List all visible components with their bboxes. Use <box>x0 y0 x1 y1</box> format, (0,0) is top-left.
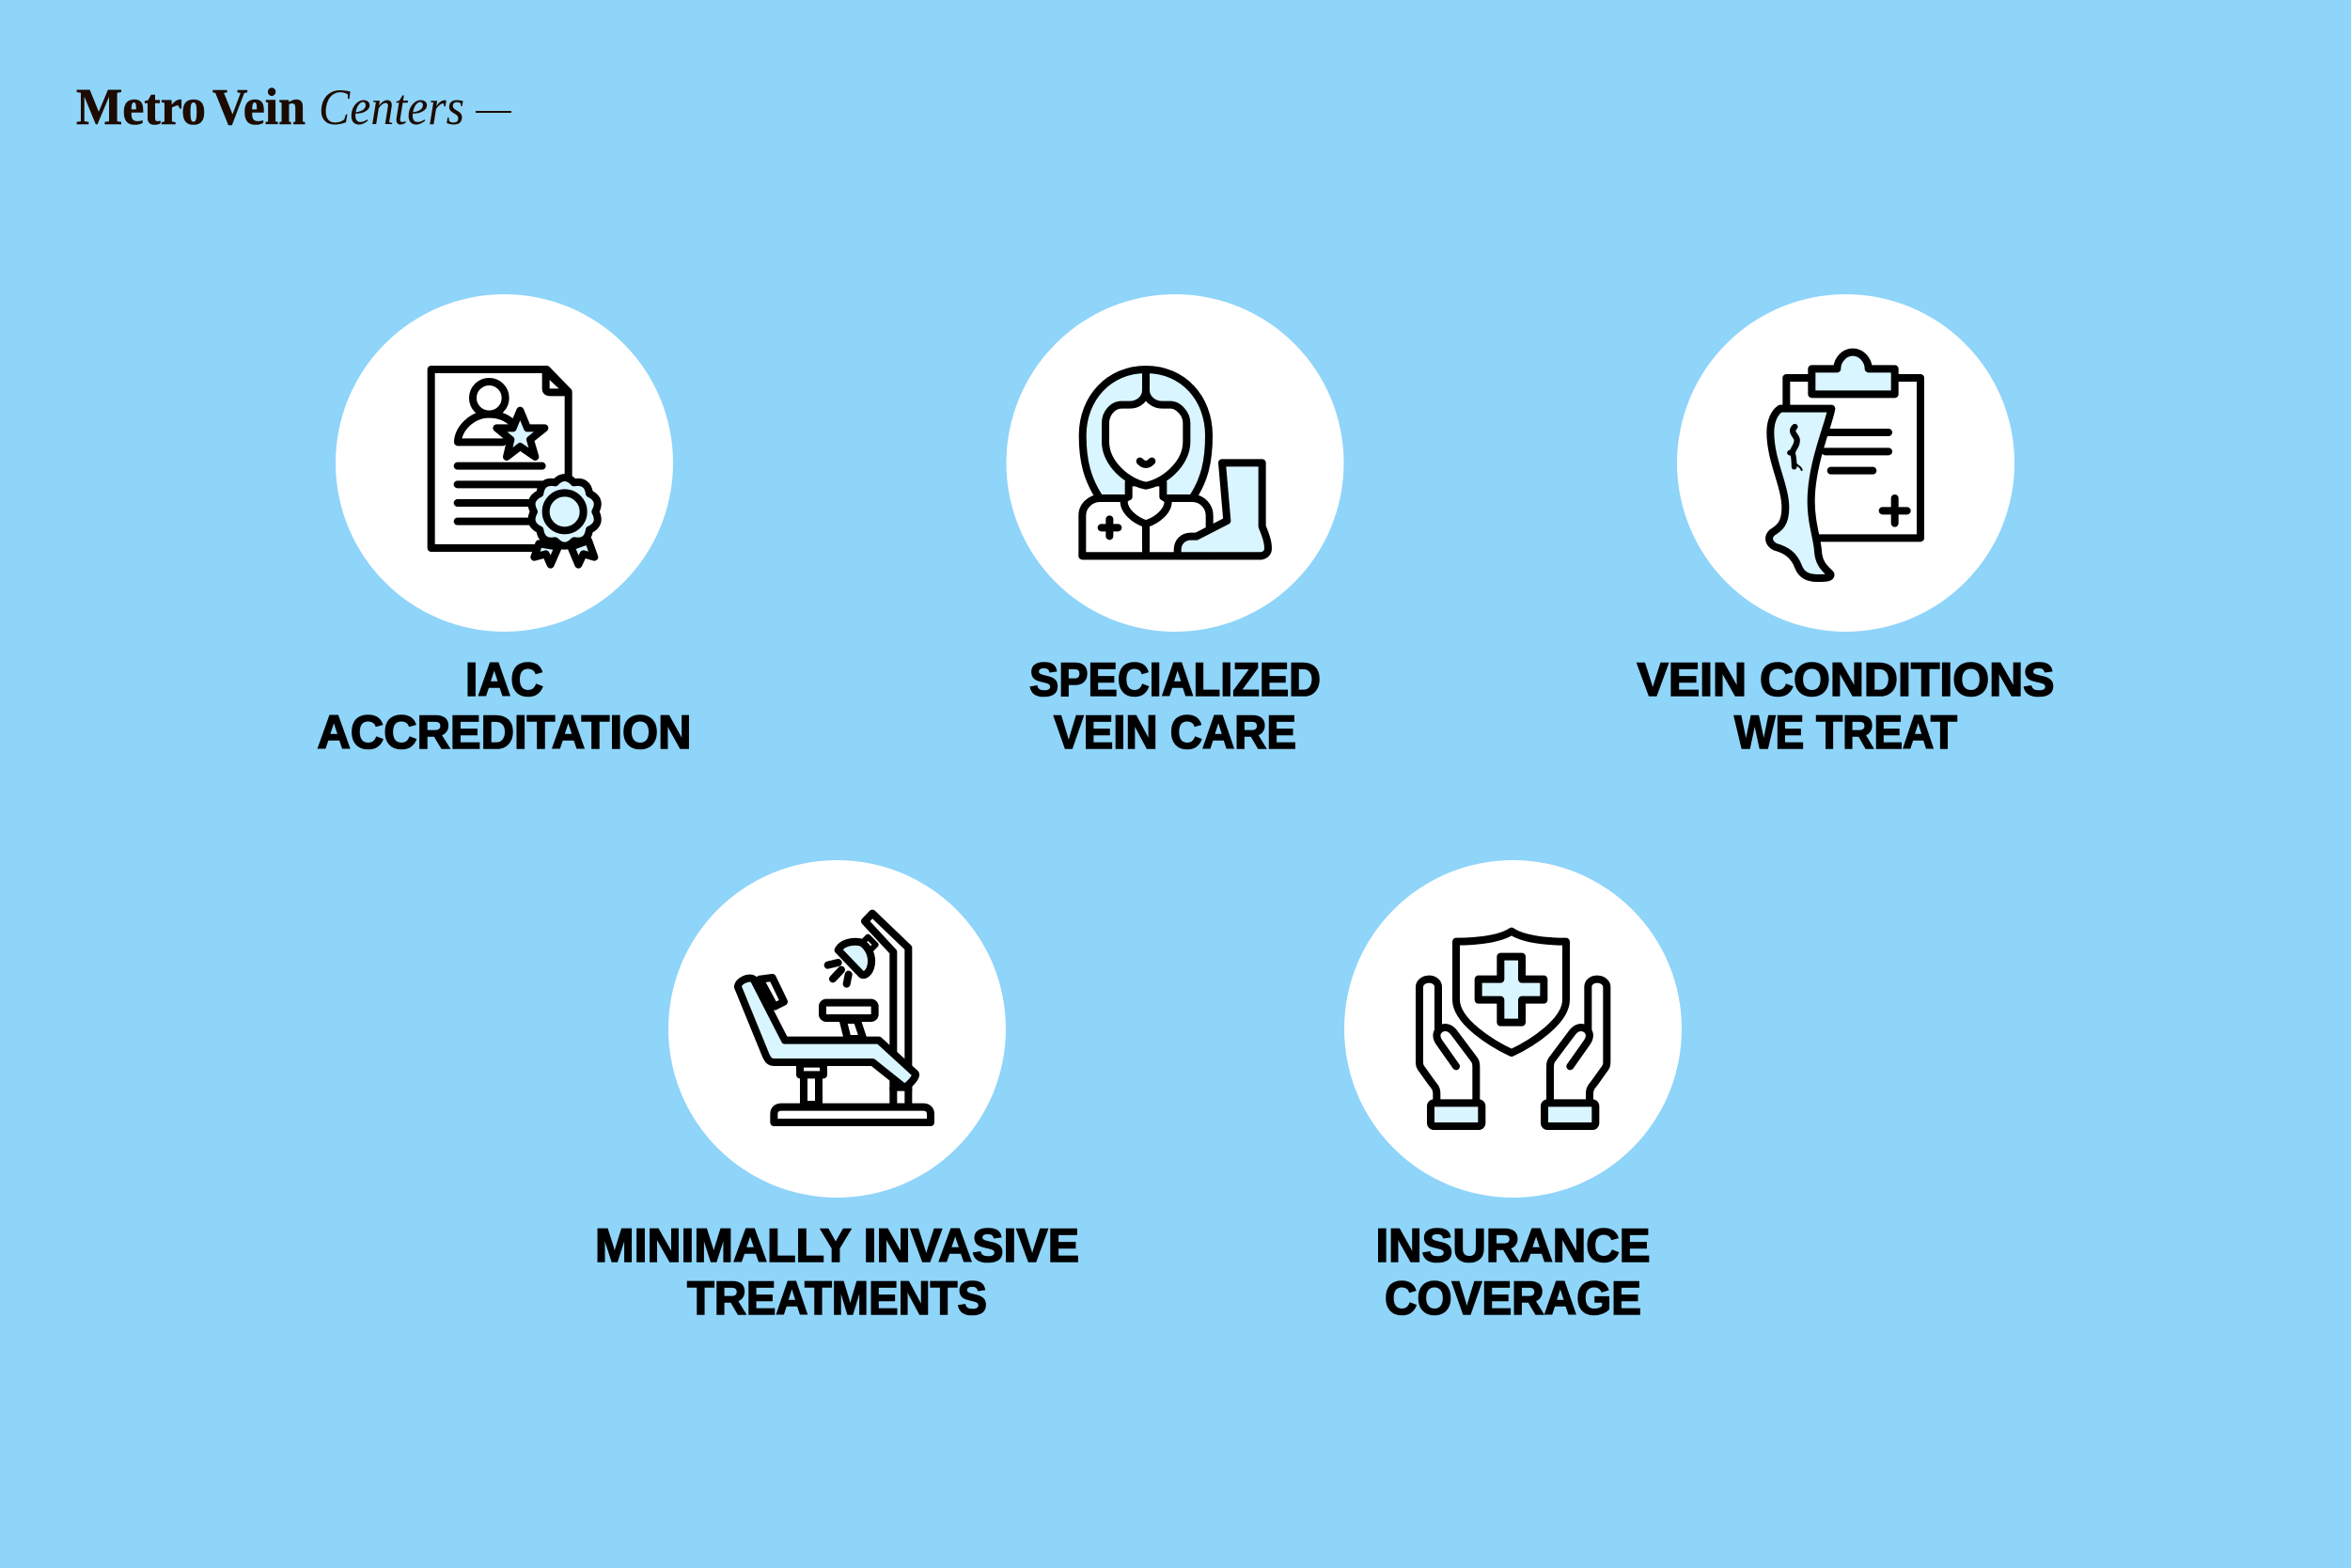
label: vein conditions we treat: WE TREAT <box>1734 706 1957 759</box>
circle: IAC accreditation <box>336 294 673 632</box>
label: vein conditions we treat: VEIN CONDITIONS <box>1638 653 2055 706</box>
label: minimally invasive treatments <box>595 1219 1079 1325</box>
label: minimally invasive treatments: TREATMENTS <box>687 1272 987 1325</box>
label: specialized vein care: VEIN CARE <box>1054 706 1296 759</box>
logo: Metro Vein Centers: Vein <box>212 78 306 135</box>
item: minimally invasive treatments <box>595 860 1079 1325</box>
label: IAC accreditation <box>318 653 692 759</box>
logo: Metro Vein Centers: Metro <box>76 78 206 135</box>
label: insurance coverage: COVERAGE <box>1385 1272 1641 1325</box>
label: insurance coverage: INSURANCE <box>1376 1219 1651 1272</box>
label: IAC accreditation: IAC <box>465 653 543 706</box>
item: specialized vein care <box>1006 294 1344 759</box>
logo: Metro Vein Centers: Centers <box>319 79 464 135</box>
label: insurance coverage <box>1376 1219 1651 1325</box>
logo: Metro Vein Centers <box>76 78 511 135</box>
circle: minimally invasive treatments <box>668 860 1006 1198</box>
icon: doctor with foot <box>1082 369 1268 556</box>
circle: specialized vein care <box>1006 294 1344 632</box>
item: IAC accreditation <box>318 294 692 759</box>
icon: treatment chair with lamp <box>738 914 931 1122</box>
item: vein conditions we treat <box>1638 294 2055 759</box>
circle: insurance coverage <box>1344 860 1682 1198</box>
item: insurance coverage <box>1344 860 1682 1325</box>
label: specialized vein care: SPECIALIZED <box>1029 653 1321 706</box>
circle: vein conditions <box>1677 294 2014 632</box>
label: vein conditions we treat <box>1638 653 2055 759</box>
label: minimally invasive treatments: MINIMALLY INVASIVE <box>595 1219 1079 1272</box>
label: IAC accreditation: ACCREDITATION <box>318 706 692 759</box>
icon: hands holding shield <box>1419 932 1607 1126</box>
label: specialized vein care <box>1029 653 1321 759</box>
icon: certificate with seal <box>431 369 598 565</box>
icon: clipboard with leg <box>1769 353 1920 578</box>
